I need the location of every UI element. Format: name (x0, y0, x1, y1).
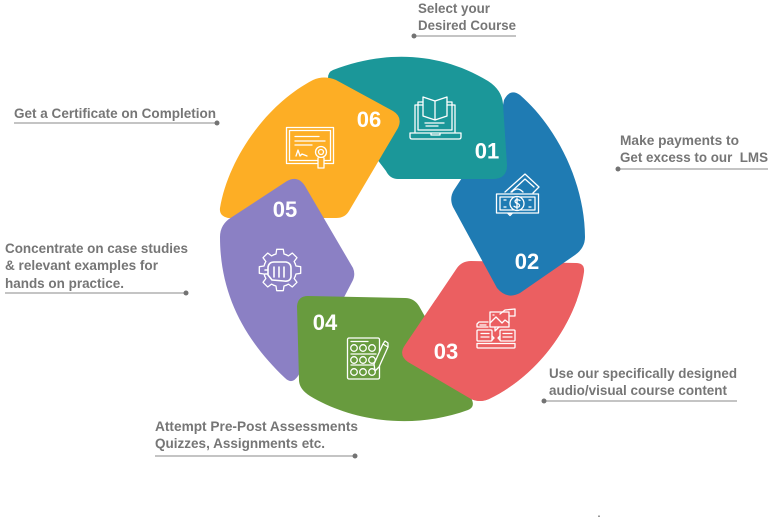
label: step 03: Use our specifically designed (549, 365, 737, 381)
label: step 03 (542, 365, 737, 404)
icon: gear with fist (259, 249, 301, 291)
number 05: 05 (273, 197, 297, 222)
label: step 01: Desired Course (418, 17, 516, 33)
icon: book on laptop (410, 97, 461, 139)
segment 03 base: red (402, 261, 584, 401)
segment 06: orange (220, 78, 400, 218)
label: step 05: Concentrate on case studies (5, 240, 188, 256)
label: step 05 (5, 240, 188, 296)
label: step 04: Attempt Pre-Post Assessments (155, 418, 358, 434)
segment 01: teal (328, 57, 507, 179)
stray dot at bottom edge (598, 516, 600, 517)
number 04: 04 (313, 310, 338, 335)
icon: banknotes (496, 174, 539, 216)
label: step 05: hands on practice. (5, 275, 124, 291)
label: step 02: Make payments to (620, 132, 739, 148)
label: step 03: audio/visual course content (549, 382, 727, 398)
label: step 04: Quizzes, Assignments etc. (155, 435, 325, 451)
icon: media content (477, 309, 515, 348)
segment 05: purple (220, 179, 354, 381)
icon: quiz sheet and pen (348, 338, 388, 379)
icon: certificate (286, 128, 334, 168)
label: step 05: & relevant examples for (5, 257, 159, 273)
label: step 01 (412, 0, 516, 38)
segment 04: green (297, 296, 473, 421)
label: step 04 (155, 418, 358, 458)
number 02: 02 (515, 249, 539, 274)
number 03: 03 (434, 339, 458, 364)
segment 03 overlap: red over green (402, 300, 577, 401)
label: step 06: Get a Certificate on Completion (14, 105, 216, 121)
number 01: 01 (475, 138, 499, 164)
segment 02: blue (451, 92, 585, 296)
number 06: 06 (357, 107, 381, 132)
label: step 01: Select your (418, 0, 491, 16)
label: step 02 (616, 132, 768, 172)
